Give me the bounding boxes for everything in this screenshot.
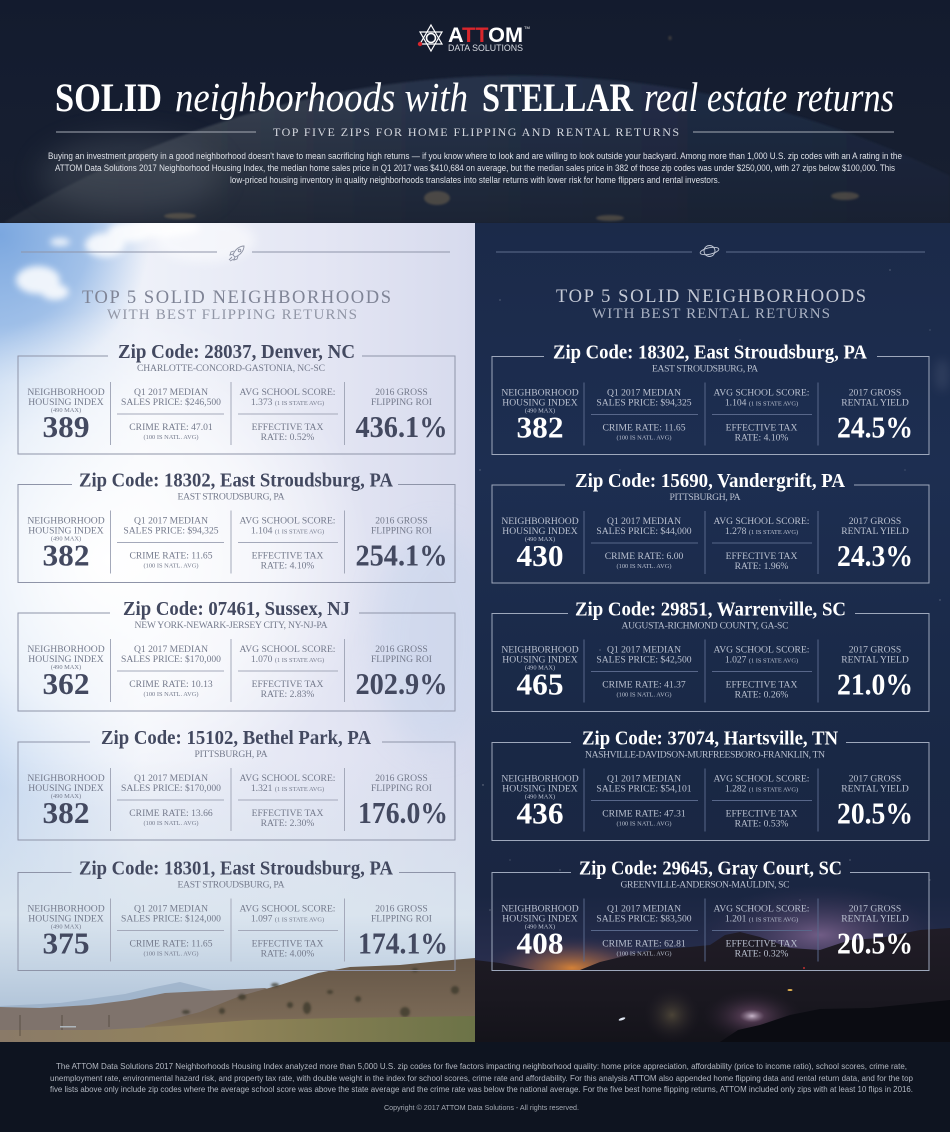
card: 18301 East Stroudsburg PA: [18, 858, 455, 970]
housing index: 389: [42, 409, 90, 444]
tax rate: EFFECTIVE TAX: [726, 551, 797, 562]
housing index: [501, 644, 579, 702]
header background: night sky and globe: [0, 0, 950, 225]
tax rate: [726, 808, 797, 830]
median price: SALES PRICE: $83,500: [596, 914, 692, 924]
school score: [714, 904, 809, 924]
housing index: [27, 644, 105, 701]
housing index: [27, 773, 105, 830]
flipping ROI: [356, 387, 448, 444]
housing index: NEIGHBORHOOD: [27, 516, 105, 526]
crime rate: [129, 550, 213, 570]
median price: [596, 516, 692, 537]
crime rate: (100 IS NATL. AVG): [617, 820, 671, 828]
housing index: NEIGHBORHOOD: [501, 774, 579, 784]
flipping ROI: [358, 773, 448, 830]
median price: [121, 644, 221, 665]
zip heading: Zip Code: 18302, East Stroudsburg, PA: [553, 342, 867, 364]
median price: [596, 904, 692, 924]
housing index: 430: [516, 538, 564, 573]
crime rate: [129, 679, 213, 698]
school score: AVG SCHOOL SCORE:: [240, 904, 335, 914]
metro area: AUGUSTA-RICHMOND COUNTY, GA-SC: [622, 620, 788, 632]
housing index: (490 MAX): [525, 664, 555, 672]
tax rate: [252, 679, 323, 700]
school score: [240, 516, 335, 536]
rental yield: [837, 774, 913, 830]
title: STELLAR: [482, 75, 634, 120]
flipping ROI: 2016 GROSS: [375, 516, 428, 526]
card: 28037 Denver NC: [18, 341, 455, 454]
footer methodology text: The ATTOM Data Solutions 2017 Neighborhoods Housing Index analyzed more than 5,000 U.S. zip codes for five factors impacting neighborhood quality: home price appreciation, affordability (price to income ratio), school scores, crime rate,: [56, 1061, 907, 1071]
housing index: [501, 516, 579, 573]
median price: Q1 2017 MEDIAN: [134, 516, 208, 526]
left panel background: daytime sky and hills: [0, 223, 475, 1042]
crime rate: (100 IS NATL. AVG): [144, 820, 198, 827]
crime rate: [129, 422, 213, 441]
school score: [714, 388, 809, 408]
flipping ROI: FLIPPING ROI: [371, 914, 432, 924]
median price: SALES PRICE: $42,500: [596, 654, 692, 666]
flipping ROI: 254.1%: [356, 538, 448, 572]
card: 37074 Hartsville TN: [492, 728, 929, 840]
housing index: [501, 774, 579, 830]
card: 07461 Sussex NJ: [18, 598, 455, 711]
card: 29645 Gray Court SC: [492, 858, 929, 970]
tax rate: RATE: 0.52%: [261, 432, 314, 443]
school score: AVG SCHOOL SCORE:: [714, 774, 809, 784]
flipping ROI: [358, 904, 448, 960]
crime rate: (100 IS NATL. AVG): [617, 692, 671, 698]
crime rate: (100 IS NATL. AVG): [144, 950, 198, 958]
median price: [123, 516, 219, 536]
housing index: (490 MAX): [525, 924, 555, 930]
rental yield: 24.5%: [837, 410, 913, 444]
housing index: HOUSING INDEX: [502, 526, 578, 537]
school score: [240, 773, 335, 794]
housing index: (490 MAX): [525, 536, 555, 543]
panel heading: WITH BEST RENTAL RETURNS: [592, 306, 830, 322]
divider with rocket: [21, 246, 450, 261]
median price: [596, 644, 692, 666]
school score: 1.373 (1 IS STATE AVG): [251, 397, 324, 408]
median price: [596, 774, 692, 794]
median price: SALES PRICE: $94,325: [596, 398, 692, 408]
tax rate: RATE: 0.32%: [735, 948, 788, 960]
crime rate: (100 IS NATL. AVG): [617, 563, 671, 570]
rental yield: 2017 GROSS: [849, 516, 901, 527]
median price: Q1 2017 MEDIAN: [607, 516, 681, 527]
title: [55, 74, 894, 120]
flipping ROI: [356, 644, 448, 701]
school score: AVG SCHOOL SCORE:: [714, 388, 809, 398]
median price: Q1 2017 MEDIAN: [607, 644, 681, 656]
median price: [121, 773, 221, 794]
tax rate: [726, 551, 797, 572]
tax rate: [726, 422, 797, 444]
zip heading: Zip Code: 18301, East Stroudsburg, PA: [79, 858, 393, 880]
crime rate: [129, 808, 213, 827]
median price: SALES PRICE: $170,000: [121, 654, 221, 665]
school score: [240, 644, 335, 665]
tax rate: EFFECTIVE TAX: [252, 422, 323, 433]
tax rate: [252, 422, 323, 443]
median price: Q1 2017 MEDIAN: [607, 774, 681, 784]
rental yield: [837, 644, 913, 702]
median price: [121, 387, 221, 408]
median price: Q1 2017 MEDIAN: [134, 904, 208, 914]
housing index: [501, 904, 579, 960]
school score: [714, 516, 809, 537]
crime rate: (100 IS NATL. AVG): [617, 950, 671, 958]
divider with planet: [496, 246, 925, 256]
housing index: 465: [516, 666, 564, 702]
tax rate: RATE: 0.26%: [735, 690, 788, 700]
school score: [714, 774, 809, 794]
housing index: (490 MAX): [51, 793, 81, 800]
tax rate: [252, 938, 323, 960]
rental yield: RENTAL YIELD: [841, 784, 909, 794]
right panel background: starry night and mountains: [475, 223, 950, 1042]
median price: Q1 2017 MEDIAN: [607, 904, 681, 914]
crime rate: CRIME RATE: 13.66: [129, 808, 213, 819]
school score: AVG SCHOOL SCORE:: [714, 516, 809, 527]
rental yield: 24.3%: [837, 538, 913, 573]
tax rate: EFFECTIVE TAX: [252, 938, 323, 950]
crime rate: CRIME RATE: 41.37: [602, 680, 686, 690]
tax rate: [252, 808, 323, 829]
tax rate: RATE: 4.10%: [261, 560, 314, 572]
school score: 1.027 (1 IS STATE AVG): [725, 654, 798, 666]
crime rate: (100 IS NATL. AVG): [144, 691, 198, 698]
housing index: NEIGHBORHOOD: [27, 387, 105, 398]
panel heading: TOP 5 SOLID NEIGHBORHOODS: [556, 287, 866, 307]
housing index: 362: [42, 666, 90, 701]
housing index: [501, 388, 579, 444]
metro area: EAST STROUDSBURG, PA: [178, 880, 285, 890]
rental yield: 2017 GROSS: [849, 644, 901, 656]
housing index: 382: [516, 410, 564, 444]
school score: 1.104 (1 IS STATE AVG): [251, 526, 324, 536]
median price: Q1 2017 MEDIAN: [607, 388, 681, 398]
crime rate: [605, 551, 684, 570]
housing index: NEIGHBORHOOD: [27, 904, 105, 914]
rental yield: RENTAL YIELD: [841, 526, 909, 537]
zip heading: Zip Code: 29645, Gray Court, SC: [579, 858, 842, 880]
card: 15690 Vandergrift PA: [492, 470, 929, 583]
tax rate: RATE: 1.96%: [735, 561, 788, 572]
housing index: HOUSING INDEX: [502, 914, 578, 924]
rental yield: 2017 GROSS: [849, 774, 901, 784]
rental yield: 2017 GROSS: [849, 904, 901, 914]
intro paragraph: ATTOM Data Solutions 2017 Neighborhood Housing Index, the median home sales price in Q1 2017 was $410,684 on average, but the median sales price in 382 of those zip codes was under $250,000, with 27 zips below $100,000. This: [55, 163, 896, 173]
housing index: NEIGHBORHOOD: [501, 644, 579, 656]
tax rate: EFFECTIVE TAX: [252, 679, 323, 690]
crime rate: [129, 938, 213, 958]
school score: AVG SCHOOL SCORE:: [240, 644, 335, 655]
icon: atom star: [418, 25, 442, 51]
rental yield: [837, 516, 913, 573]
tagline: DATA SOLUTIONS: [448, 43, 523, 54]
metro area: NASHVILLE-DAVIDSON-MURFREESBORO-FRANKLIN, TN: [585, 750, 825, 760]
ATTOM Data Solutions logo: [418, 24, 530, 54]
median price: SALES PRICE: $54,101: [596, 784, 692, 794]
rental yield: 2017 GROSS: [849, 388, 901, 398]
metro area: GREENVILLE-ANDERSON-MAULDIN, SC: [620, 880, 790, 890]
crime rate: (100 IS NATL. AVG): [144, 434, 198, 441]
school score: [240, 387, 335, 408]
median price: Q1 2017 MEDIAN: [134, 644, 208, 655]
zip heading: Zip Code: 37074, Hartsville, TN: [582, 728, 838, 750]
icon: planet: [700, 246, 719, 256]
tax rate: RATE: 4.00%: [261, 948, 314, 960]
tax rate: RATE: 4.10%: [735, 432, 788, 444]
housing index: (490 MAX): [525, 794, 555, 800]
tax rate: EFFECTIVE TAX: [252, 550, 323, 562]
metro area: EAST STROUDSBURG, PA: [652, 364, 758, 374]
school score: 1.070 (1 IS STATE AVG): [251, 654, 324, 665]
housing index: NEIGHBORHOOD: [27, 644, 105, 655]
school score: 1.278 (1 IS STATE AVG): [725, 526, 798, 537]
subtitle with rules: TOP FIVE ZIPS FOR HOME FLIPPING AND RENTAL RETURNS: [273, 125, 679, 139]
housing index: 436: [516, 796, 564, 830]
housing index: HOUSING INDEX: [28, 654, 104, 665]
crime rate: CRIME RATE: 10.13: [129, 679, 213, 690]
school score: AVG SCHOOL SCORE:: [714, 904, 809, 914]
flipping ROI: FLIPPING ROI: [371, 526, 432, 536]
crime rate: [602, 680, 686, 698]
housing index: (490 MAX): [51, 664, 81, 671]
housing index: [27, 904, 105, 960]
crime rate: CRIME RATE: 11.65: [129, 938, 213, 950]
flipping ROI: 2016 GROSS: [375, 773, 428, 784]
intro paragraph: Buying an investment property in a good neighborhood doesn't have to mean sacrificing high returns — if you know where to look and are willing to look outside your backyard. Among more than 1,000 U.S. zip codes with an A rating in the: [48, 151, 902, 161]
housing index: NEIGHBORHOOD: [501, 516, 579, 527]
rental yield: [837, 388, 913, 444]
card: 15102 Bethel Park PA: [18, 727, 455, 840]
panel: rental returns: [492, 246, 929, 970]
school score: 1.201 (1 IS STATE AVG): [725, 914, 798, 924]
tax rate: EFFECTIVE TAX: [726, 808, 797, 820]
icon: rocket: [229, 246, 244, 261]
housing index: HOUSING INDEX: [502, 398, 578, 408]
housing index: NEIGHBORHOOD: [501, 388, 579, 398]
housing index: (490 MAX): [51, 407, 81, 414]
median price: Q1 2017 MEDIAN: [134, 387, 208, 398]
housing index: 382: [42, 795, 90, 830]
tax rate: EFFECTIVE TAX: [726, 680, 797, 690]
rental yield: RENTAL YIELD: [841, 398, 909, 408]
housing index: HOUSING INDEX: [28, 783, 104, 794]
crime rate: [602, 808, 686, 828]
flipping ROI: FLIPPING ROI: [371, 654, 432, 665]
school score: 1.321 (1 IS STATE AVG): [251, 783, 324, 794]
tax rate: RATE: 0.53%: [735, 818, 788, 830]
housing index: (490 MAX): [51, 536, 81, 542]
school score: AVG SCHOOL SCORE:: [240, 387, 335, 398]
panel heading: TOP 5 SOLID NEIGHBORHOODS: [82, 288, 391, 308]
zip heading: Zip Code: 29851, Warrenville, SC: [575, 598, 846, 620]
flipping ROI: 174.1%: [358, 926, 448, 960]
tax rate: EFFECTIVE TAX: [252, 808, 323, 819]
panel heading: [556, 287, 866, 322]
school score: [714, 644, 809, 666]
housing index: 408: [516, 926, 564, 960]
crime rate: CRIME RATE: 47.31: [602, 808, 686, 820]
wordmark: ATTOM: [448, 24, 523, 47]
footer methodology text: [50, 1061, 913, 1094]
crime rate: [602, 938, 686, 958]
crime rate: [602, 422, 686, 442]
metro area: CHARLOTTE-CONCORD-GASTONIA, NC-SC: [137, 363, 325, 374]
flipping ROI: 2016 GROSS: [375, 644, 428, 655]
intro paragraph: low-priced housing inventory in quality neighborhoods translates into stellar returns with lower risk for home flippers and rental investors.: [230, 175, 720, 185]
tax rate: [726, 680, 797, 700]
title: SOLID: [55, 75, 162, 120]
rental yield: RENTAL YIELD: [841, 914, 909, 924]
flipping ROI: FLIPPING ROI: [371, 397, 432, 408]
housing index: (490 MAX): [51, 924, 81, 930]
housing index: 375: [42, 926, 90, 960]
crime rate: CRIME RATE: 11.65: [129, 550, 213, 562]
tax rate: EFFECTIVE TAX: [726, 422, 797, 434]
flipping ROI: 436.1%: [356, 409, 448, 444]
footer background: [0, 1042, 950, 1132]
housing index: HOUSING INDEX: [28, 526, 104, 536]
title: neighborhoods with: [175, 74, 468, 120]
crime rate: (100 IS NATL. AVG): [144, 562, 198, 570]
crime rate: CRIME RATE: 62.81: [602, 938, 686, 950]
rental yield: [837, 904, 913, 960]
crime rate: (100 IS NATL. AVG): [617, 434, 671, 442]
median price: SALES PRICE: $124,000: [121, 914, 221, 924]
intro paragraph: [48, 151, 902, 185]
housing index: NEIGHBORHOOD: [27, 773, 105, 784]
housing index: NEIGHBORHOOD: [501, 904, 579, 914]
school score: AVG SCHOOL SCORE:: [714, 644, 809, 656]
zip heading: Zip Code: 15102, Bethel Park, PA: [101, 727, 371, 749]
crime rate: CRIME RATE: 6.00: [605, 551, 684, 562]
tax rate: RATE: 2.30%: [261, 818, 314, 829]
median price: SALES PRICE: $170,000: [121, 783, 221, 794]
crime rate: CRIME RATE: 11.65: [602, 422, 686, 434]
title: real estate returns: [644, 74, 894, 120]
rental yield: 21.0%: [837, 666, 913, 702]
median price: SALES PRICE: $94,325: [123, 526, 219, 536]
housing index: (490 MAX): [525, 408, 555, 414]
school score: 1.097 (1 IS STATE AVG): [251, 914, 324, 924]
metro area: NEW YORK-NEWARK-JERSEY CITY, NY-NJ-PA: [134, 620, 328, 631]
tax rate: [252, 550, 323, 572]
median price: Q1 2017 MEDIAN: [134, 773, 208, 784]
median price: [121, 904, 221, 924]
zip heading: Zip Code: 15690, Vandergrift, PA: [575, 470, 845, 492]
median price: SALES PRICE: $44,000: [596, 526, 692, 537]
housing index: HOUSING INDEX: [502, 654, 578, 666]
tax rate: EFFECTIVE TAX: [726, 938, 797, 950]
flipping ROI: [356, 516, 448, 572]
housing index: [27, 516, 105, 572]
metro area: PITTSBURGH, PA: [670, 492, 741, 503]
card: 29851 Warrenville SC: [492, 598, 929, 712]
rental yield: 20.5%: [837, 926, 913, 960]
trademark: TM: [524, 25, 530, 30]
metro area: PITTSBURGH, PA: [194, 749, 268, 760]
housing index: 382: [42, 538, 90, 572]
tax rate: RATE: 2.83%: [261, 689, 314, 700]
panel heading: [82, 288, 391, 323]
school score: 1.282 (1 IS STATE AVG): [725, 784, 798, 794]
card: 18302 East Stroudsburg PA: [492, 342, 929, 454]
housing index: HOUSING INDEX: [28, 397, 104, 408]
median price: SALES PRICE: $246,500: [121, 397, 221, 408]
rental yield: RENTAL YIELD: [841, 654, 909, 666]
school score: AVG SCHOOL SCORE:: [240, 516, 335, 526]
housing index: HOUSING INDEX: [28, 914, 104, 924]
flipping ROI: 202.9%: [356, 666, 448, 701]
flipping ROI: 2016 GROSS: [375, 904, 428, 914]
housing index: HOUSING INDEX: [502, 784, 578, 794]
zip heading: Zip Code: 07461, Sussex, NJ: [123, 598, 350, 620]
school score: [240, 904, 335, 924]
housing index: [27, 387, 105, 444]
school score: 1.104 (1 IS STATE AVG): [725, 398, 798, 408]
card: 18302 East Stroudsburg PA: [18, 470, 455, 582]
flipping ROI: FLIPPING ROI: [371, 783, 432, 794]
median price: [596, 388, 692, 408]
zip heading: Zip Code: 18302, East Stroudsburg, PA: [79, 470, 393, 492]
zip heading: Zip Code: 28037, Denver, NC: [118, 341, 355, 363]
crime rate: CRIME RATE: 47.01: [129, 422, 213, 433]
metro area: EAST STROUDSBURG, PA: [178, 492, 285, 502]
tax rate: [726, 938, 797, 960]
panel heading: WITH BEST FLIPPING RETURNS: [107, 307, 357, 323]
flipping ROI: 176.0%: [358, 795, 448, 830]
flipping ROI: 2016 GROSS: [375, 387, 428, 398]
copyright: Copyright © 2017 ATTOM Data Solutions - All rights reserved.: [384, 1103, 579, 1112]
rental yield: 20.5%: [837, 796, 913, 830]
panel: flipping returns: [18, 246, 455, 970]
school score: AVG SCHOOL SCORE:: [240, 773, 335, 784]
